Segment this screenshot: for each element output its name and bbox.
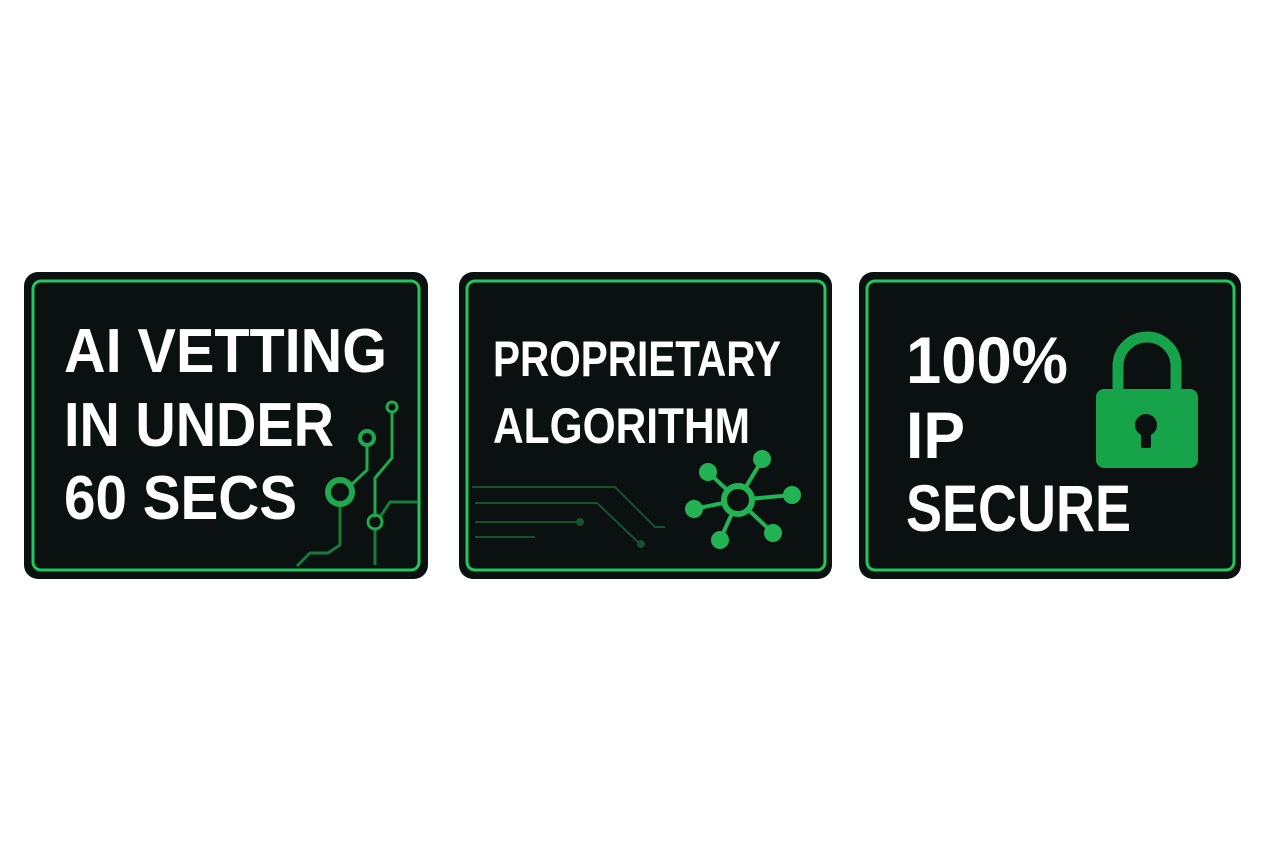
heading: 100% IP secure xyxy=(906,323,1131,545)
heading: AI vetting in under 60 secs: IN UNDER xyxy=(64,391,334,460)
icon: circuit traces xyxy=(297,402,418,566)
icon: padlock xyxy=(1096,337,1198,468)
icon: faded data traces xyxy=(472,487,665,547)
heading: proprietary algorithm xyxy=(493,331,781,454)
heading: AI vetting in under 60 secs: 60 SECS xyxy=(64,464,297,533)
panel: IP secure xyxy=(859,272,1241,579)
heading: proprietary algorithm: ALGORITHM xyxy=(493,398,750,454)
heading: AI vetting in under 60 secs xyxy=(64,317,387,533)
heading: AI vetting in under 60 secs: AI VETTING xyxy=(64,317,387,386)
heading: 100% IP secure: 100% xyxy=(906,323,1068,397)
heading: proprietary algorithm: PROPRIETARY xyxy=(493,331,781,387)
panel: proprietary algorithm xyxy=(459,272,832,579)
panel: AI vetting xyxy=(24,272,428,579)
icon: network node xyxy=(687,452,799,547)
heading: 100% IP secure: SECURE xyxy=(906,471,1131,545)
heading: 100% IP secure: IP xyxy=(906,398,965,472)
